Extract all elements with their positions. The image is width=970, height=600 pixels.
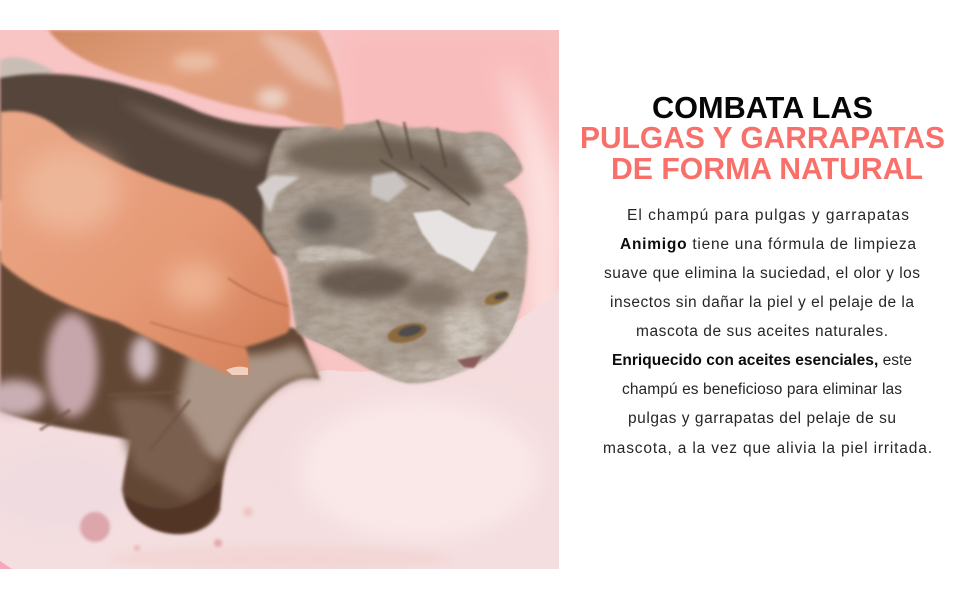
heading line 3: DE FORMA NATURAL	[611, 151, 923, 186]
body text: Enriquecido con aceites esenciales, este	[612, 352, 912, 369]
right eye	[484, 290, 510, 306]
heading line 1: COMBATA LAS	[652, 90, 873, 125]
left eye	[386, 322, 428, 344]
lower fur and leg	[0, 250, 320, 534]
body text: champú es beneficioso para eliminar las	[622, 381, 902, 398]
body text: suave que elimina la suciedad, el olor y los	[604, 265, 920, 282]
body text: pulgas y garrapatas del pelaje de su	[628, 410, 896, 427]
head shading	[264, 120, 528, 383]
nose	[457, 355, 483, 368]
body text: mascota, a la vez que alivia la piel irritada.	[603, 440, 932, 457]
basin rim	[361, 46, 559, 316]
foam water	[0, 290, 559, 570]
heading	[580, 90, 945, 186]
body text: mascota de sus aceites naturales.	[636, 323, 888, 340]
cat back	[0, 57, 300, 260]
hand on the neck	[0, 111, 290, 376]
top hand	[48, 30, 344, 130]
body text: insectos sin dañar la piel y el pelaje de la	[610, 294, 914, 311]
body text: Animigo tiene una fórmula de limpieza	[620, 236, 916, 253]
fur tufts	[377, 120, 470, 205]
body text: El champú para pulgas y garrapatas	[627, 207, 909, 224]
cat head	[255, 115, 535, 390]
shampoo foam on head	[413, 210, 497, 272]
body text	[603, 207, 932, 457]
ear foam	[257, 175, 300, 213]
photo: cat being bathed	[0, 30, 559, 570]
heading line 2: PULGAS Y GARRAPATAS	[580, 120, 945, 155]
